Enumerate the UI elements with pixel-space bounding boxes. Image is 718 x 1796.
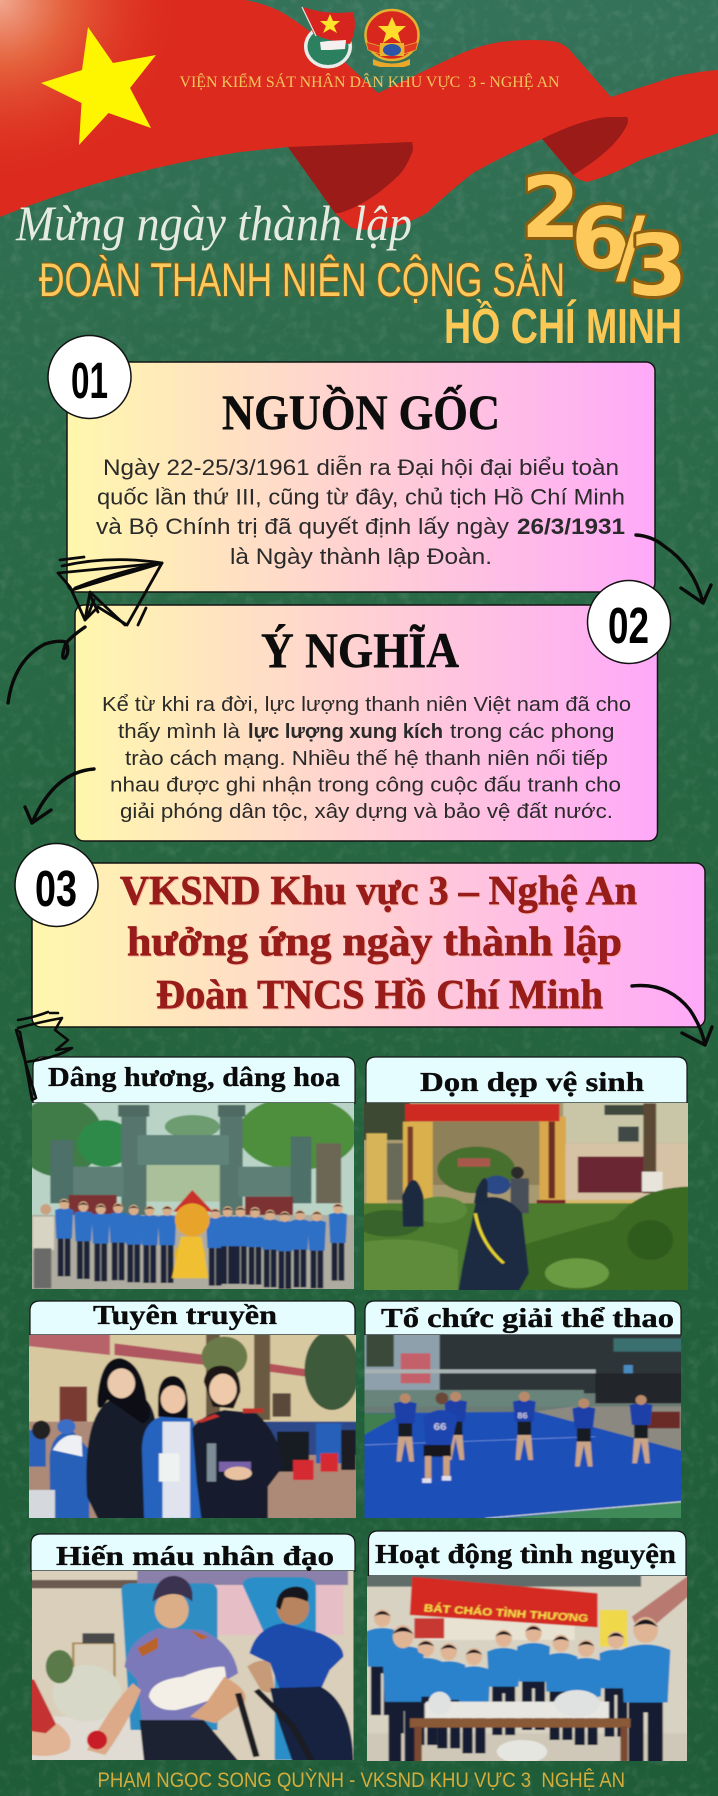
text block: y nghia: lực lượng xung kích — [248, 720, 443, 743]
text block: y nghia — [102, 693, 631, 823]
photo — [32, 1571, 354, 1760]
date 26/3: 3 — [628, 217, 687, 316]
badge 03 — [15, 844, 98, 926]
label: Tuyên truyền — [93, 1300, 277, 1330]
header — [31, 1534, 355, 1571]
header — [368, 1531, 686, 1576]
panel: VKSND title — [32, 863, 705, 1027]
icon: flag doodle — [16, 1012, 72, 1100]
arrow: to panel 3 — [25, 769, 94, 823]
photo panel: giai the thao — [364, 1300, 682, 1518]
panel: y nghia — [75, 605, 658, 841]
photo panel: tinh nguyen — [367, 1530, 687, 1761]
photo panel: dang huong — [16, 1057, 364, 1297]
photo: 86 — [517, 1412, 528, 1421]
photo — [29, 1335, 356, 1518]
label: Dâng hương, dâng hoa — [48, 1062, 341, 1092]
badge 02: 02 — [608, 597, 649, 654]
label: Hiến máu nhân đạo — [56, 1541, 334, 1571]
icon: youth union logo — [302, 7, 355, 68]
panel: nguon goc — [67, 362, 655, 592]
date 26/3 — [521, 159, 687, 316]
text block: y nghia: trong các phong — [450, 720, 614, 743]
arrow: plane trail — [8, 627, 85, 703]
heading: VKSND: Đoàn TNCS Hồ Chí Minh — [156, 971, 603, 1017]
text block: nguon goc: 26/3/1931 — [517, 514, 625, 539]
photo: BÁT CHÁO TÌNH THƯƠNG — [423, 1602, 589, 1625]
heading: VKSND: hưởng ứng ngày thành lập — [127, 918, 622, 964]
date 26/3: 2 — [521, 159, 580, 258]
badge 01 — [48, 336, 131, 418]
heading: y nghia: Ý NGHĨA — [261, 622, 459, 678]
text block: nguon goc: là Ngày thành lập Đoàn. — [230, 544, 492, 569]
photo: 66 — [434, 1421, 447, 1432]
photo — [364, 1335, 681, 1518]
heading: nguon goc: NGUỒN GỐC — [222, 383, 500, 440]
text block: y nghia: nhau được ghi nhận trong công cuộc đấu tranh cho — [110, 774, 621, 796]
badge 02 — [588, 580, 670, 664]
header — [33, 1057, 355, 1103]
header — [365, 1301, 681, 1335]
text block: nguon goc: và Bộ Chính trị đã quyết định lấy ngày — [96, 514, 509, 539]
text block: y nghia: giải phóng dân tộc, xây dựng và bảo vệ đất nước. — [120, 800, 613, 823]
heading: VKSND: VKSND Khu vực 3 – Nghệ An — [120, 867, 637, 913]
icon: flag star — [41, 27, 156, 145]
heading: VKSND — [120, 867, 637, 1017]
label: Hoạt động tình nguyện — [375, 1539, 676, 1569]
photo panel: hien mau — [23, 1534, 362, 1765]
arrow: to panel 2 — [636, 535, 711, 603]
photo panel: don dep — [355, 1057, 698, 1297]
title: script line: Mừng ngày thành lập — [15, 195, 412, 251]
title: main line: ĐOÀN THANH NIÊN CỘNG SẢN — [39, 253, 565, 306]
footer credit: PHẠM NGỌC SONG QUỲNH - VKSND KHU VỰC 3 NGHỆ AN — [98, 1769, 625, 1792]
text block: nguon goc — [96, 455, 625, 569]
text block: y nghia: thấy mình là — [118, 720, 241, 743]
photo — [32, 1103, 354, 1289]
badge 01: 01 — [71, 352, 108, 409]
header — [366, 1057, 687, 1103]
icon: procuracy emblem — [366, 10, 418, 67]
text block: nguon goc: quốc lần thứ III, cũng từ đây, chủ tịch Hồ Chí Minh — [97, 484, 625, 510]
photo — [367, 1576, 687, 1761]
header — [30, 1301, 355, 1335]
badge 03: 03 — [35, 860, 77, 917]
arrow: to photos — [632, 986, 712, 1045]
date 26/3: 6 — [571, 190, 630, 289]
text block: y nghia: Kể từ khi ra đời, lực lượng thanh niên Việt nam đã cho — [102, 693, 631, 716]
text block: y nghia: trào cách mạng. Nhiều thế hệ thanh niên nối tiếp — [125, 747, 608, 770]
flag ribbon — [0, 0, 718, 230]
organisation name: VIỆN KIỂM SÁT NHÂN DÂN KHU VỰC 3 - NGHỆ AN — [180, 72, 560, 91]
icon: paper plane — [58, 557, 162, 625]
photo — [364, 1103, 688, 1290]
text block: nguon goc: Ngày 22-25/3/1961 diễn ra Đại hội đại biểu toàn — [103, 455, 619, 480]
photo panel: tuyen truyen — [18, 1300, 366, 1527]
date 26/3: / — [616, 200, 646, 293]
label: Tổ chức giải thể thao — [381, 1303, 674, 1333]
label: Dọn dẹp vệ sinh — [420, 1067, 644, 1097]
